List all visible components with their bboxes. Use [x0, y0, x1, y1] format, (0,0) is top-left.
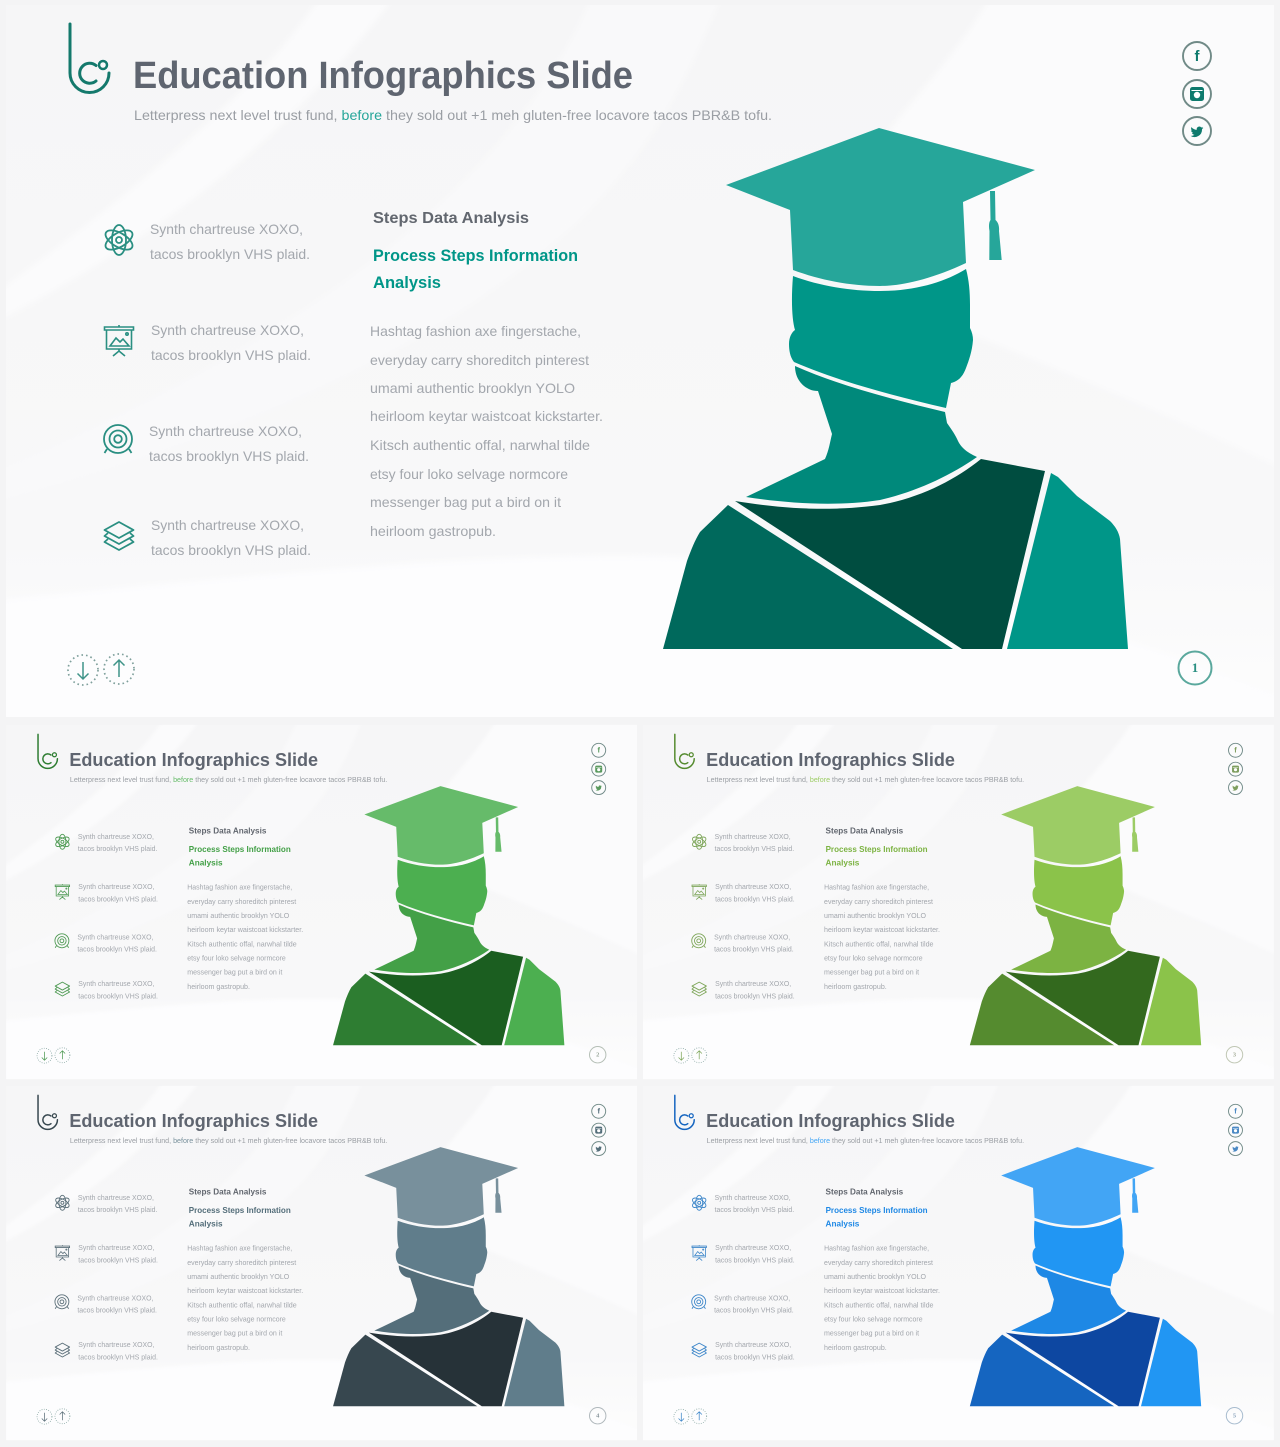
social icons — [1229, 1104, 1242, 1156]
list item 1: tacos brooklyn VHS plaid. — [150, 246, 310, 262]
icon: layers — [55, 982, 70, 996]
list item 3: Synth chartreuse XOXO, — [77, 934, 154, 941]
page number — [590, 1047, 606, 1063]
list item 1: tacos brooklyn VHS plaid. — [78, 846, 157, 853]
list item 3: Synth chartreuse XOXO, — [77, 1295, 154, 1302]
body text: Kitsch authentic offal, narwhal tilde — [187, 941, 297, 948]
list item 2: Synth chartreuse XOXO, — [151, 322, 304, 338]
list item 4: Synth chartreuse XOXO, — [715, 981, 791, 988]
list item 4: tacos brooklyn VHS plaid. — [715, 994, 795, 1001]
list item 4: Synth chartreuse XOXO, — [78, 1342, 154, 1349]
list item 2: tacos brooklyn VHS plaid. — [151, 347, 311, 363]
social icons — [592, 1104, 606, 1156]
social icons — [592, 743, 606, 795]
body text: Hashtag fashion axe fingerstache, — [187, 885, 292, 892]
body text: heirloom gastropub. — [187, 1345, 250, 1352]
icon: atom — [103, 225, 135, 255]
body text: umami authentic brooklyn YOLO — [187, 1274, 290, 1281]
page number: 1 — [1192, 660, 1198, 675]
graduate silhouette — [333, 786, 564, 1045]
list item 4: tacos brooklyn VHS plaid. — [715, 1355, 795, 1362]
subheading: Process Steps Information — [189, 845, 291, 854]
icon: atom — [54, 1195, 71, 1210]
panel: main teal slide — [0, 0, 1280, 720]
body text: everyday carry shoreditch pinterest — [824, 1260, 933, 1267]
title: Education Infographics Slide — [69, 750, 318, 771]
body text: heirloom keytar waistcoat kickstarter. — [824, 927, 940, 934]
subheading: Process Steps Information — [373, 247, 578, 265]
navigation arrows — [674, 1409, 707, 1424]
list item 1: Synth chartreuse XOXO, — [78, 1195, 154, 1202]
panel: light green slide — [640, 722, 1279, 1081]
title: Education Infographics Slide — [706, 750, 955, 771]
icon: atom — [691, 834, 707, 849]
body text: etsy four loko selvage normcore — [824, 956, 923, 963]
body text: umami authentic brooklyn YOLO — [187, 913, 290, 920]
icon: target — [55, 934, 69, 948]
social icons — [1229, 743, 1242, 795]
logo — [70, 24, 109, 92]
title: Education Infographics Slide — [69, 1111, 318, 1132]
body text: umami authentic brooklyn YOLO — [824, 913, 927, 920]
panel: green slide — [3, 722, 642, 1081]
icon: layers — [55, 1343, 70, 1357]
page number: 2 — [596, 1052, 599, 1059]
body text: umami authentic brooklyn YOLO — [370, 380, 575, 396]
icon: atom — [54, 834, 71, 849]
list item 4: Synth chartreuse XOXO, — [78, 981, 154, 988]
body text: etsy four loko selvage normcore — [187, 1317, 286, 1324]
icon: layers — [692, 1343, 706, 1357]
social icons: f — [1234, 746, 1237, 755]
body text: messenger bag put a bird on it — [824, 1331, 919, 1338]
social icons: f — [1194, 48, 1200, 65]
list item 4: Synth chartreuse XOXO, — [151, 517, 304, 533]
list item 3: tacos brooklyn VHS plaid. — [714, 947, 794, 954]
icon: target — [104, 425, 132, 453]
icon: presentation board — [55, 1245, 70, 1261]
body text: Kitsch authentic offal, narwhal tilde — [187, 1302, 297, 1309]
graduate silhouette — [663, 128, 1128, 649]
list item 3: tacos brooklyn VHS plaid. — [77, 947, 157, 954]
body text: heirloom keytar waistcoat kickstarter. — [187, 927, 303, 934]
body text: messenger bag put a bird on it — [370, 494, 561, 510]
icon: layers — [104, 522, 134, 550]
heading: Steps Data Analysis — [826, 826, 904, 835]
subheading: Analysis — [826, 1220, 860, 1229]
page number — [1226, 1408, 1243, 1424]
icon: presentation board — [55, 884, 70, 900]
subheading: Analysis — [189, 1220, 223, 1229]
list item 4: tacos brooklyn VHS plaid. — [151, 542, 311, 558]
icon: presentation board — [104, 325, 134, 356]
icon: atom — [691, 1195, 707, 1210]
icon: target — [692, 934, 706, 948]
list item 1: Synth chartreuse XOXO, — [78, 834, 154, 841]
subtitle: Letterpress next level trust fund, before they sold out +1 meh gluten-free locavore tacos PBR&B tofu. — [707, 1138, 1024, 1145]
heading: Steps Data Analysis — [373, 210, 529, 227]
list item 2: Synth chartreuse XOXO, — [78, 884, 154, 891]
list item 2: tacos brooklyn VHS plaid. — [78, 897, 158, 904]
body text: etsy four loko selvage normcore — [370, 466, 568, 482]
list item 2: Synth chartreuse XOXO, — [78, 1245, 154, 1252]
subtitle: Letterpress next level trust fund, before they sold out +1 meh gluten-free locavore tacos PBR&B tofu. — [707, 777, 1024, 784]
subheading: Analysis — [373, 274, 441, 292]
list item 2: tacos brooklyn VHS plaid. — [715, 897, 795, 904]
body text: heirloom keytar waistcoat kickstarter. — [370, 408, 603, 424]
body text: Kitsch authentic offal, narwhal tilde — [370, 437, 590, 453]
body text: etsy four loko selvage normcore — [187, 956, 286, 963]
graduate silhouette — [970, 786, 1201, 1045]
body text: Hashtag fashion axe fingerstache, — [824, 885, 929, 892]
navigation arrows — [37, 1409, 70, 1424]
list item 2: Synth chartreuse XOXO, — [715, 1245, 791, 1252]
logo — [675, 1095, 694, 1129]
subtitle: Letterpress next level trust fund, before they sold out +1 meh gluten-free locavore tacos PBR&B tofu. — [70, 777, 387, 784]
icon: presentation board — [692, 1245, 706, 1261]
body text: heirloom gastropub. — [187, 984, 250, 991]
body text: heirloom keytar waistcoat kickstarter. — [187, 1288, 303, 1295]
body text: messenger bag put a bird on it — [187, 970, 282, 977]
body text: heirloom keytar waistcoat kickstarter. — [824, 1288, 940, 1295]
navigation arrows — [68, 654, 134, 685]
page number — [1226, 1047, 1243, 1063]
graduate silhouette — [333, 1147, 564, 1406]
list item 2: tacos brooklyn VHS plaid. — [78, 1258, 158, 1265]
body text: everyday carry shoreditch pinterest — [824, 899, 933, 906]
body text: messenger bag put a bird on it — [824, 970, 919, 977]
list item 1: Synth chartreuse XOXO, — [150, 221, 303, 237]
body text: umami authentic brooklyn YOLO — [824, 1274, 927, 1281]
list item 4: Synth chartreuse XOXO, — [715, 1342, 791, 1349]
graduate silhouette — [970, 1147, 1201, 1406]
page number: 3 — [1233, 1052, 1236, 1059]
list item 3: Synth chartreuse XOXO, — [714, 934, 790, 941]
icon: layers — [692, 982, 706, 996]
list item 3: tacos brooklyn VHS plaid. — [149, 448, 309, 464]
subtitle: Letterpress next level trust fund, before they sold out +1 meh gluten-free locavore tacos PBR&B tofu. — [70, 1138, 387, 1145]
body text: everyday carry shoreditch pinterest — [370, 352, 589, 368]
body text: Hashtag fashion axe fingerstache, — [370, 323, 581, 339]
body text: Kitsch authentic offal, narwhal tilde — [824, 1302, 934, 1309]
list item 1: Synth chartreuse XOXO, — [715, 834, 791, 841]
list item 3: tacos brooklyn VHS plaid. — [714, 1308, 794, 1315]
page number: 5 — [1233, 1413, 1236, 1420]
body text: Kitsch authentic offal, narwhal tilde — [824, 941, 934, 948]
navigation arrows — [37, 1048, 70, 1063]
title: Education Infographics Slide — [133, 55, 633, 97]
list item 3: tacos brooklyn VHS plaid. — [77, 1308, 157, 1315]
icon: presentation board — [692, 884, 706, 900]
body text: everyday carry shoreditch pinterest — [187, 1260, 296, 1267]
body text: Hashtag fashion axe fingerstache, — [187, 1246, 292, 1253]
social icons: f — [1234, 1107, 1237, 1116]
list item 1: tacos brooklyn VHS plaid. — [715, 1207, 794, 1214]
social icons: f — [597, 1107, 600, 1116]
list item 4: tacos brooklyn VHS plaid. — [78, 1355, 158, 1362]
social icons — [1183, 42, 1211, 145]
panel: blue grey slide — [3, 1083, 642, 1442]
body text: etsy four loko selvage normcore — [824, 1317, 923, 1324]
heading: Steps Data Analysis — [189, 826, 267, 835]
body text: Hashtag fashion axe fingerstache, — [824, 1246, 929, 1253]
page number — [590, 1408, 606, 1424]
list item 4: tacos brooklyn VHS plaid. — [78, 994, 158, 1001]
subheading: Process Steps Information — [826, 1206, 928, 1215]
social icons: f — [597, 746, 600, 755]
body text: messenger bag put a bird on it — [187, 1331, 282, 1338]
panel: blue slide — [640, 1083, 1279, 1442]
list item 3: Synth chartreuse XOXO, — [714, 1295, 790, 1302]
list item 2: Synth chartreuse XOXO, — [715, 884, 791, 891]
icon: target — [692, 1295, 706, 1309]
subtitle: Letterpress next level trust fund, before they sold out +1 meh gluten-free locavore tacos PBR&B tofu. — [134, 107, 772, 123]
subheading: Process Steps Information — [826, 845, 928, 854]
body text: heirloom gastropub. — [824, 1345, 887, 1352]
logo — [38, 734, 57, 768]
page number: 4 — [596, 1413, 600, 1420]
list item 2: tacos brooklyn VHS plaid. — [715, 1258, 795, 1265]
body text: heirloom gastropub. — [824, 984, 887, 991]
heading: Steps Data Analysis — [189, 1187, 267, 1196]
list item 1: Synth chartreuse XOXO, — [715, 1195, 791, 1202]
list item 3: Synth chartreuse XOXO, — [149, 423, 302, 439]
list item 1: tacos brooklyn VHS plaid. — [78, 1207, 157, 1214]
body text: everyday carry shoreditch pinterest — [187, 899, 296, 906]
subheading: Analysis — [189, 859, 223, 868]
list item 1: tacos brooklyn VHS plaid. — [715, 846, 794, 853]
body text: heirloom gastropub. — [370, 523, 496, 539]
logo — [38, 1095, 57, 1129]
page number — [1178, 652, 1212, 684]
subheading: Analysis — [826, 859, 860, 868]
logo — [675, 734, 694, 768]
navigation arrows — [674, 1048, 707, 1063]
icon: target — [55, 1295, 69, 1309]
heading: Steps Data Analysis — [826, 1187, 904, 1196]
subheading: Process Steps Information — [189, 1206, 291, 1215]
title: Education Infographics Slide — [706, 1111, 955, 1132]
